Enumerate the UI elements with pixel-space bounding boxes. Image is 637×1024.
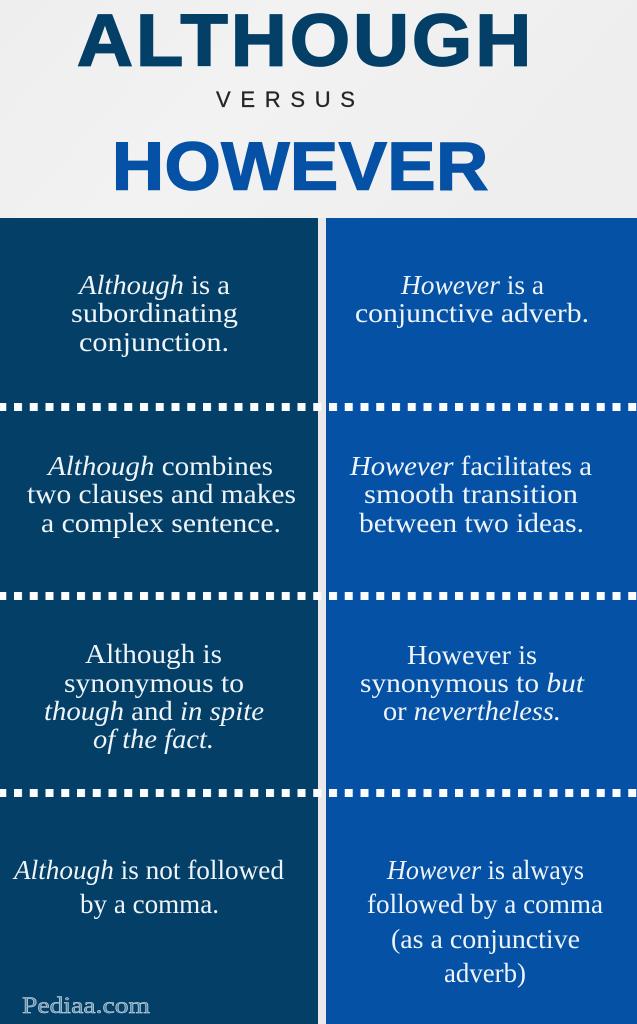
text block: however row 1: However is a: [400, 269, 544, 300]
subtitle: versus: VERSUS: [216, 87, 365, 112]
logo: Pediaa.com: Pediaa.com: [22, 993, 150, 1018]
text block: however row 1: [355, 269, 589, 328]
text block: although row 1: subordinating: [71, 297, 238, 328]
text block: although row 4: by a comma.: [80, 888, 219, 919]
text block: however row 2: [349, 450, 592, 538]
text block: however row 4: (as a conjunctive: [391, 923, 580, 954]
panel: although column: [0, 218, 318, 1024]
text block: although row 4: [12, 854, 284, 919]
text block: however row 4: followed by a comma: [367, 888, 603, 919]
text block: however row 2: However facilitates a: [349, 450, 592, 481]
title: However: HOWEVER: [112, 128, 489, 204]
text block: although row 2: Although combines: [46, 450, 273, 481]
text block: however row 3: However is: [407, 639, 537, 670]
title: Although: ALTHOUGH: [77, 0, 534, 81]
text block: however row 1: conjunctive adverb.: [355, 297, 589, 328]
text block: however row 3: synonymous to but: [360, 667, 585, 698]
header background: [0, 0, 637, 218]
text block: however row 2: between two ideas.: [359, 507, 584, 538]
text block: however row 3: or nevertheless.: [383, 695, 561, 726]
text block: although row 2: a complex sentence.: [41, 507, 281, 538]
text block: although row 1: conjunction.: [79, 326, 229, 357]
text block: however row 3: [360, 639, 585, 726]
text block: although row 3: Although is: [85, 638, 222, 669]
text block: although row 3: [44, 638, 264, 754]
text block: although row 1: [71, 269, 238, 357]
text block: although row 4: Although is not followed: [12, 854, 284, 885]
text block: however row 4: adverb): [444, 957, 526, 988]
text block: although row 1: Although is a: [77, 269, 230, 300]
text block: although row 2: [27, 450, 296, 538]
text block: although row 3: of the fact.: [93, 723, 214, 754]
text block: however row 4: However is always: [386, 854, 584, 885]
text block: however row 4: [367, 854, 603, 988]
text block: although row 3: synonymous to: [64, 667, 244, 698]
text block: although row 2: two clauses and makes: [27, 478, 296, 509]
text block: however row 2: smooth transition: [364, 478, 578, 509]
panel: however column: [326, 218, 637, 1024]
text block: although row 3: though and in spite: [44, 695, 264, 726]
